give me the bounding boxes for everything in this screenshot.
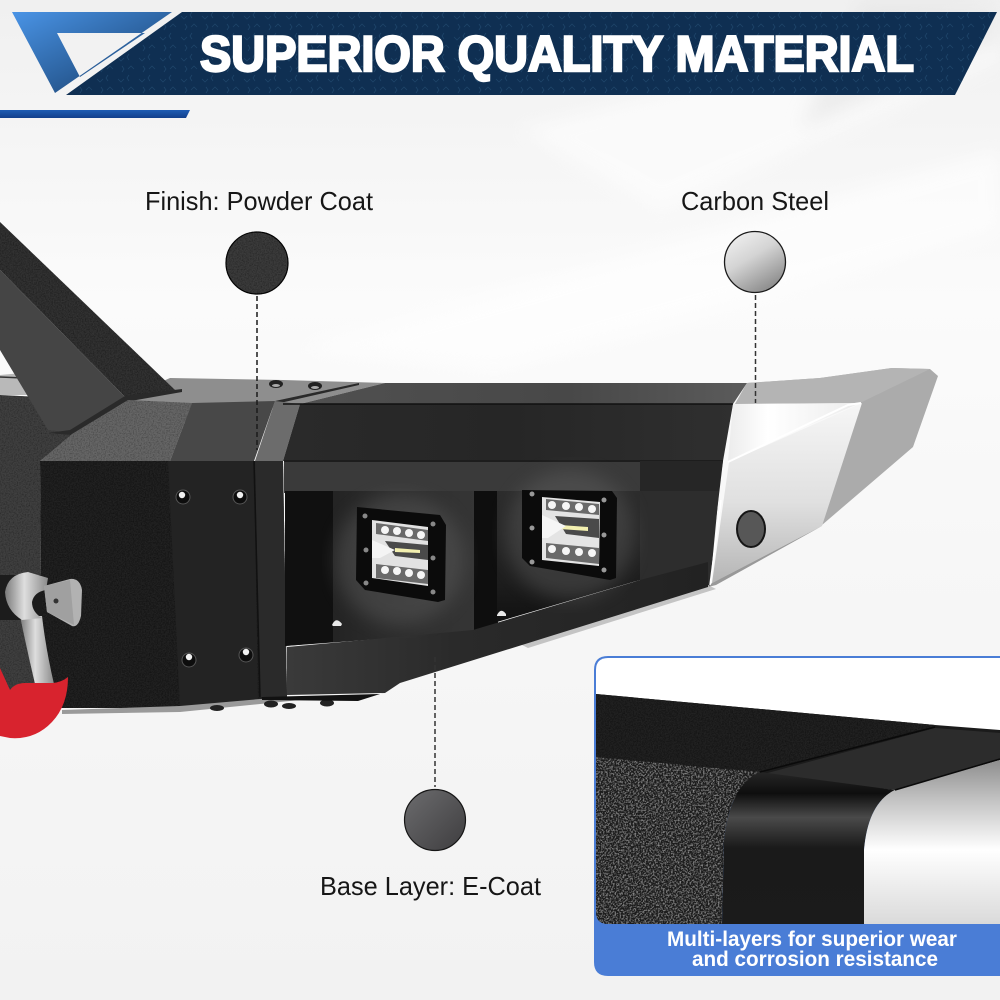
recess glints bbox=[332, 620, 342, 626]
shackle pin bbox=[44, 579, 82, 626]
label: Base Layer E-Coat: Base Layer: E-Coat bbox=[320, 871, 542, 901]
left textured block bbox=[0, 395, 75, 720]
LED light right bbox=[522, 490, 617, 580]
recess walls bbox=[285, 491, 475, 646]
silver end grey side bbox=[735, 368, 938, 525]
close-up photo bbox=[596, 694, 1000, 924]
centre top surface bbox=[40, 400, 192, 461]
accent bar bbox=[0, 110, 190, 118]
shackle shaft bbox=[20, 616, 54, 684]
underside strip bbox=[62, 694, 380, 714]
LED light left bbox=[356, 507, 446, 602]
shackle shadow bbox=[0, 575, 42, 620]
title banner bbox=[12, 12, 997, 95]
rivets on top bbox=[269, 380, 283, 388]
banner corner mark bbox=[12, 12, 172, 93]
sensor plug bbox=[737, 511, 765, 547]
shackle bbox=[0, 572, 82, 684]
bumper illustration bbox=[0, 222, 938, 738]
silver upper facet bbox=[728, 403, 860, 461]
banner body bbox=[66, 12, 997, 95]
long top face bbox=[300, 383, 747, 404]
lower ledge bbox=[287, 562, 708, 695]
side bolts bbox=[176, 490, 253, 667]
silver lower facet bbox=[712, 403, 862, 583]
ledge rivets bbox=[210, 705, 224, 711]
inset panel: multi-layer close-up bbox=[594, 656, 1000, 976]
inset panel: multi-layer close-up: and corrosion resistance bbox=[692, 948, 938, 971]
callout: powder coat swatch bbox=[226, 232, 288, 450]
grille hoop arm bbox=[0, 222, 175, 397]
panel frame bbox=[594, 656, 1000, 976]
callout: e-coat swatch bbox=[404, 657, 466, 850]
ledge silver strip bbox=[520, 585, 716, 648]
rear top plate bbox=[0, 373, 40, 395]
shackle ring bbox=[5, 572, 48, 620]
light glow bbox=[335, 495, 465, 625]
front side panel bbox=[40, 461, 287, 708]
caption: Multi-layers for superior wear bbox=[667, 928, 957, 951]
callout: carbon steel swatch bbox=[724, 232, 786, 403]
shackle red cover bbox=[0, 668, 68, 738]
title: SUPERIOR QUALITY MATERIAL bbox=[200, 26, 914, 82]
lower band bbox=[284, 461, 723, 493]
label: Finish Powder Coat: Finish: Powder Coat bbox=[145, 186, 374, 216]
label: Carbon Steel: Carbon Steel bbox=[681, 186, 829, 216]
